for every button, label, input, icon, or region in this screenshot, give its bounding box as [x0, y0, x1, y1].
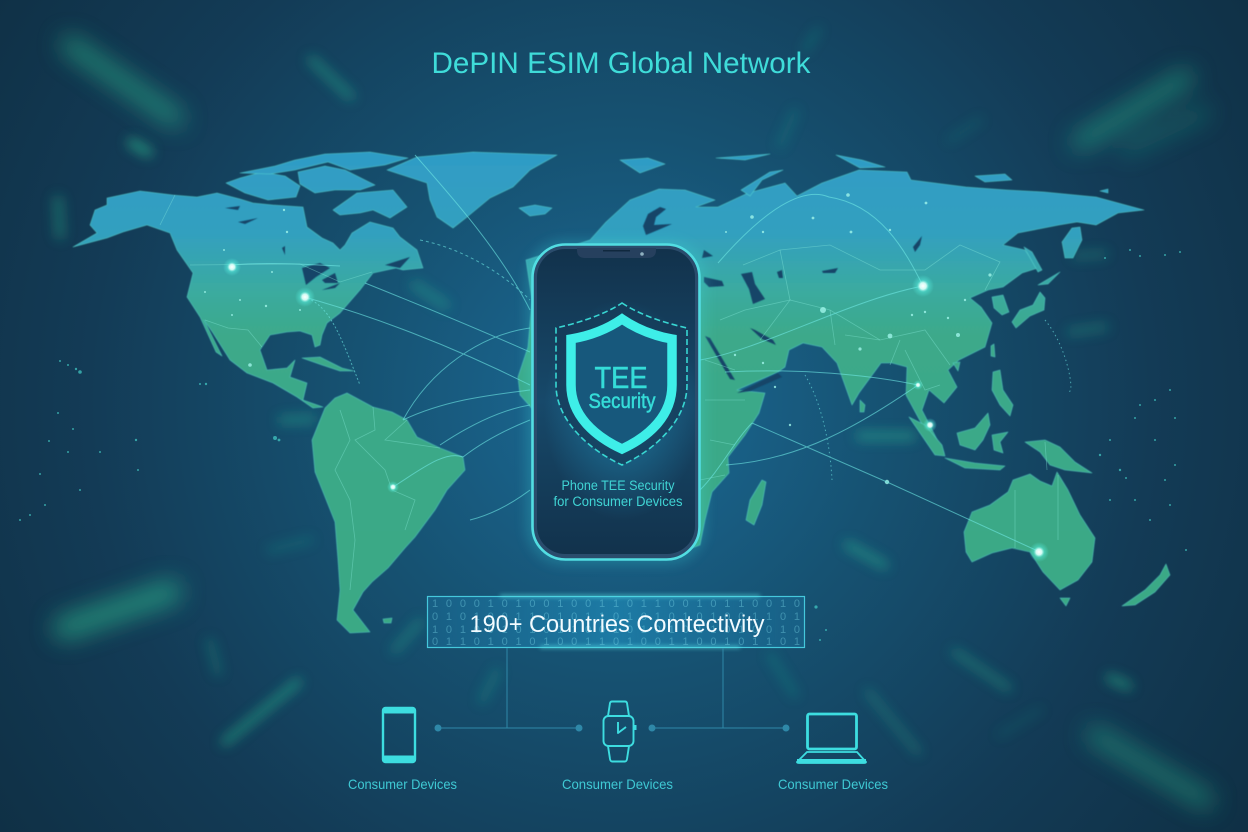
- TEE Security label: TEE: [594, 360, 648, 395]
- Philippines: [992, 370, 1013, 416]
- scattered island dots: [19, 249, 1187, 641]
- network connection lines: [232, 155, 1071, 552]
- Madagascar: [746, 480, 766, 525]
- notch: [577, 248, 656, 258]
- TEE Security label: Security: [588, 390, 656, 413]
- device labels: Consumer Devices: [348, 776, 457, 792]
- TEE Security label: [588, 360, 656, 413]
- glowing network nodes: [223, 258, 1049, 562]
- Taiwan: [991, 344, 995, 357]
- continents: [73, 152, 1170, 633]
- binary texture: [432, 598, 800, 648]
- Borneo: [957, 413, 990, 450]
- phone caption: Phone TEE Security: [562, 478, 675, 493]
- Kamchatka: [1062, 227, 1082, 258]
- Hainan: [953, 362, 960, 371]
- Ellesmere and Devon islands: [298, 166, 375, 193]
- Java: [945, 458, 1005, 470]
- screen glow: [544, 300, 700, 520]
- Cuba and Caribbean: [302, 357, 354, 371]
- Iceland: [519, 205, 552, 216]
- phone caption: for Consumer Devices: [554, 494, 683, 509]
- binary texture: 0 1 1 0 1 0 1 0 1 0 0 1 1 0 1 0 0 1 1 0 0 1 0 1 1 0 1: [432, 636, 800, 648]
- Sri Lanka: [860, 400, 865, 412]
- Sulawesi: [992, 432, 1008, 453]
- Korea: [992, 295, 1009, 315]
- Novaya Zemlya: [741, 170, 783, 196]
- Victoria and Banks islands: [226, 172, 300, 200]
- South America: [312, 393, 465, 633]
- binary texture: 1 0 1 0 0 1 0 1 0 1 1 0 0 1 0 1 0 1 0 1 1 0 1 0 0 1 0: [432, 624, 800, 636]
- Falklands: [383, 618, 392, 623]
- Sakhalin and Kurils: [1024, 247, 1042, 272]
- icon: laptop: [797, 714, 866, 763]
- Tasmania: [1060, 598, 1070, 606]
- city lights: [204, 193, 992, 484]
- phone caption: [554, 478, 683, 509]
- country borders: [160, 195, 1058, 590]
- device labels: [348, 776, 888, 792]
- banner glow edges: [500, 596, 760, 647]
- phone body: [532, 244, 700, 560]
- North America: [73, 191, 423, 408]
- banner text: 190+ Countries Comtectivity: [470, 611, 764, 638]
- seas and lakes: [225, 206, 922, 393]
- phone glow: [526, 240, 706, 565]
- Queen Elizabeth islands: [240, 152, 408, 174]
- New Guinea: [1025, 440, 1092, 473]
- inner shield: [571, 319, 672, 449]
- phone screen: [537, 249, 695, 554]
- shield: [556, 303, 687, 465]
- Australia: [964, 472, 1095, 590]
- device connectors: [435, 648, 789, 731]
- device labels: Consumer Devices: [562, 776, 673, 792]
- banner box: [428, 596, 804, 648]
- Sumatra: [909, 417, 945, 456]
- phone: [526, 240, 706, 565]
- binary texture: 1 0 0 0 1 0 1 0 0 1 0 0 1 1 0 1 1 0 0 1 0 1 1 0 0 1 0: [432, 598, 800, 610]
- binary texture: 0 1 0 1 0 0 1 1 0 1 0 1 1 0 1 0 1 0 1 0 1 0 0 1 1 0 1: [432, 611, 800, 623]
- Arctic Russia islands: [620, 158, 665, 173]
- Eurasia and Africa: [518, 170, 1144, 560]
- world map: [19, 152, 1187, 641]
- title: DePIN ESIM Global Network: [432, 47, 811, 80]
- Japan: [1012, 292, 1045, 328]
- New Zealand: [1122, 564, 1170, 606]
- Baffin island: [333, 190, 407, 218]
- icon: tablet: [383, 708, 415, 762]
- dashed outer shield: [556, 303, 687, 465]
- device labels: Consumer Devices: [778, 776, 888, 792]
- icon: smartwatch: [604, 702, 636, 762]
- Greenland: [387, 152, 557, 228]
- connectivity banner: [428, 596, 804, 648]
